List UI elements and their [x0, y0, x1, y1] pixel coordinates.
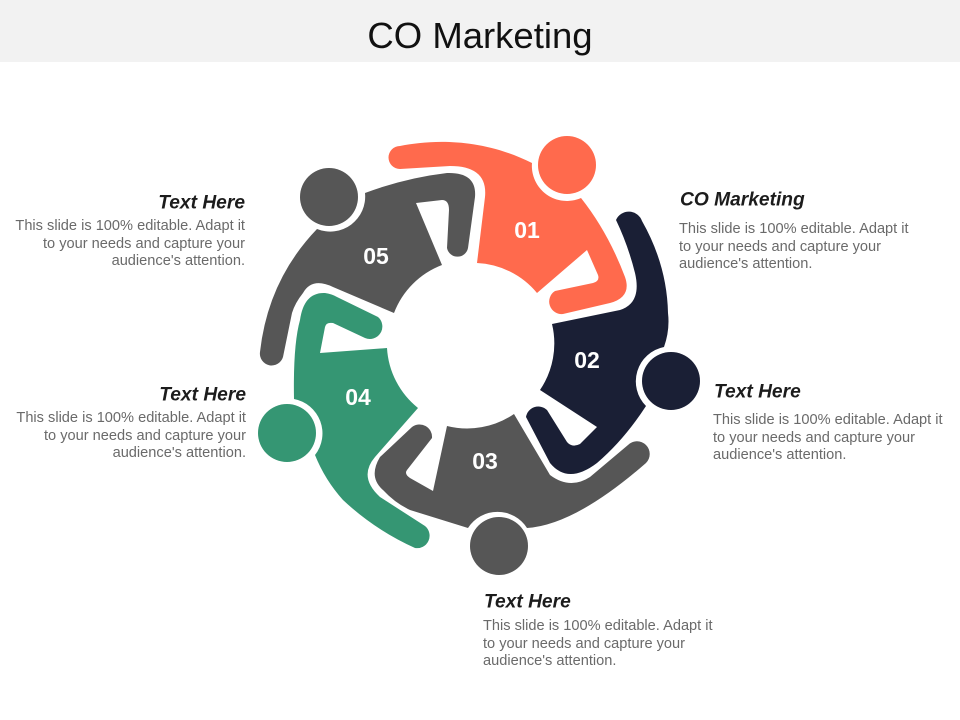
text block: bottom Text Here: to your needs and capture your [483, 636, 685, 652]
number 05: 05 [363, 243, 389, 269]
title band: CO Marketing [367, 15, 593, 56]
text block: left upper Text Here: audience's attention. [112, 253, 245, 269]
text block: left lower Text Here: to your needs and capture your [44, 428, 246, 444]
figure 04: green person [258, 293, 430, 548]
number 04: 04 [345, 384, 371, 410]
icon: navy head [642, 352, 700, 410]
text block: left lower Text Here [16, 384, 246, 461]
text block: left upper Text Here: Text Here [158, 192, 245, 214]
text block: left lower Text Here: This slide is 100% editable. Adapt it [16, 410, 246, 426]
figure 02: navy person [526, 212, 700, 474]
figure 05: dark grey person [260, 168, 475, 365]
icon: dark grey head [300, 168, 358, 226]
orange body [388, 142, 627, 314]
number 02: 02 [574, 347, 600, 373]
text block: CO Marketing [679, 190, 909, 272]
text block: left upper Text Here [15, 192, 245, 269]
text block: CO Marketing: CO Marketing [680, 190, 805, 210]
text block: right Text Here [713, 382, 943, 463]
text block: bottom Text Here [483, 592, 713, 669]
title band [0, 0, 960, 62]
text block: bottom Text Here: This slide is 100% editable. Adapt it [483, 618, 713, 634]
icon: orange head [538, 136, 596, 194]
grey body [375, 414, 650, 528]
figure 03: grey person [375, 414, 650, 575]
text block: right Text Here: to your needs and capture your [713, 430, 915, 446]
text block: left lower Text Here: Text Here [159, 384, 246, 406]
text block: left lower Text Here: audience's attention. [113, 445, 246, 461]
text block: CO Marketing: audience's attention. [679, 256, 812, 272]
text block: right Text Here: This slide is 100% editable. Adapt it [713, 412, 943, 428]
text block: CO Marketing: This slide is 100% editable. Adapt it [679, 221, 909, 237]
green body [294, 293, 430, 548]
navy body [526, 212, 668, 474]
text block: right Text Here: audience's attention. [713, 447, 846, 463]
text block: bottom Text Here: Text Here [484, 592, 571, 612]
text block: right Text Here: Text Here [714, 382, 801, 402]
dark grey body [260, 173, 475, 365]
text block: left upper Text Here: This slide is 100% editable. Adapt it [15, 218, 245, 234]
figure 01: orange person [388, 136, 627, 314]
text block: bottom Text Here: audience's attention. [483, 653, 616, 669]
icon: grey head [470, 517, 528, 575]
number 03: 03 [472, 448, 498, 474]
number 01: 01 [514, 217, 540, 243]
text block: CO Marketing: to your needs and capture your [679, 239, 881, 255]
icon: green head [258, 404, 316, 462]
text block: left upper Text Here: to your needs and capture your [43, 236, 245, 252]
